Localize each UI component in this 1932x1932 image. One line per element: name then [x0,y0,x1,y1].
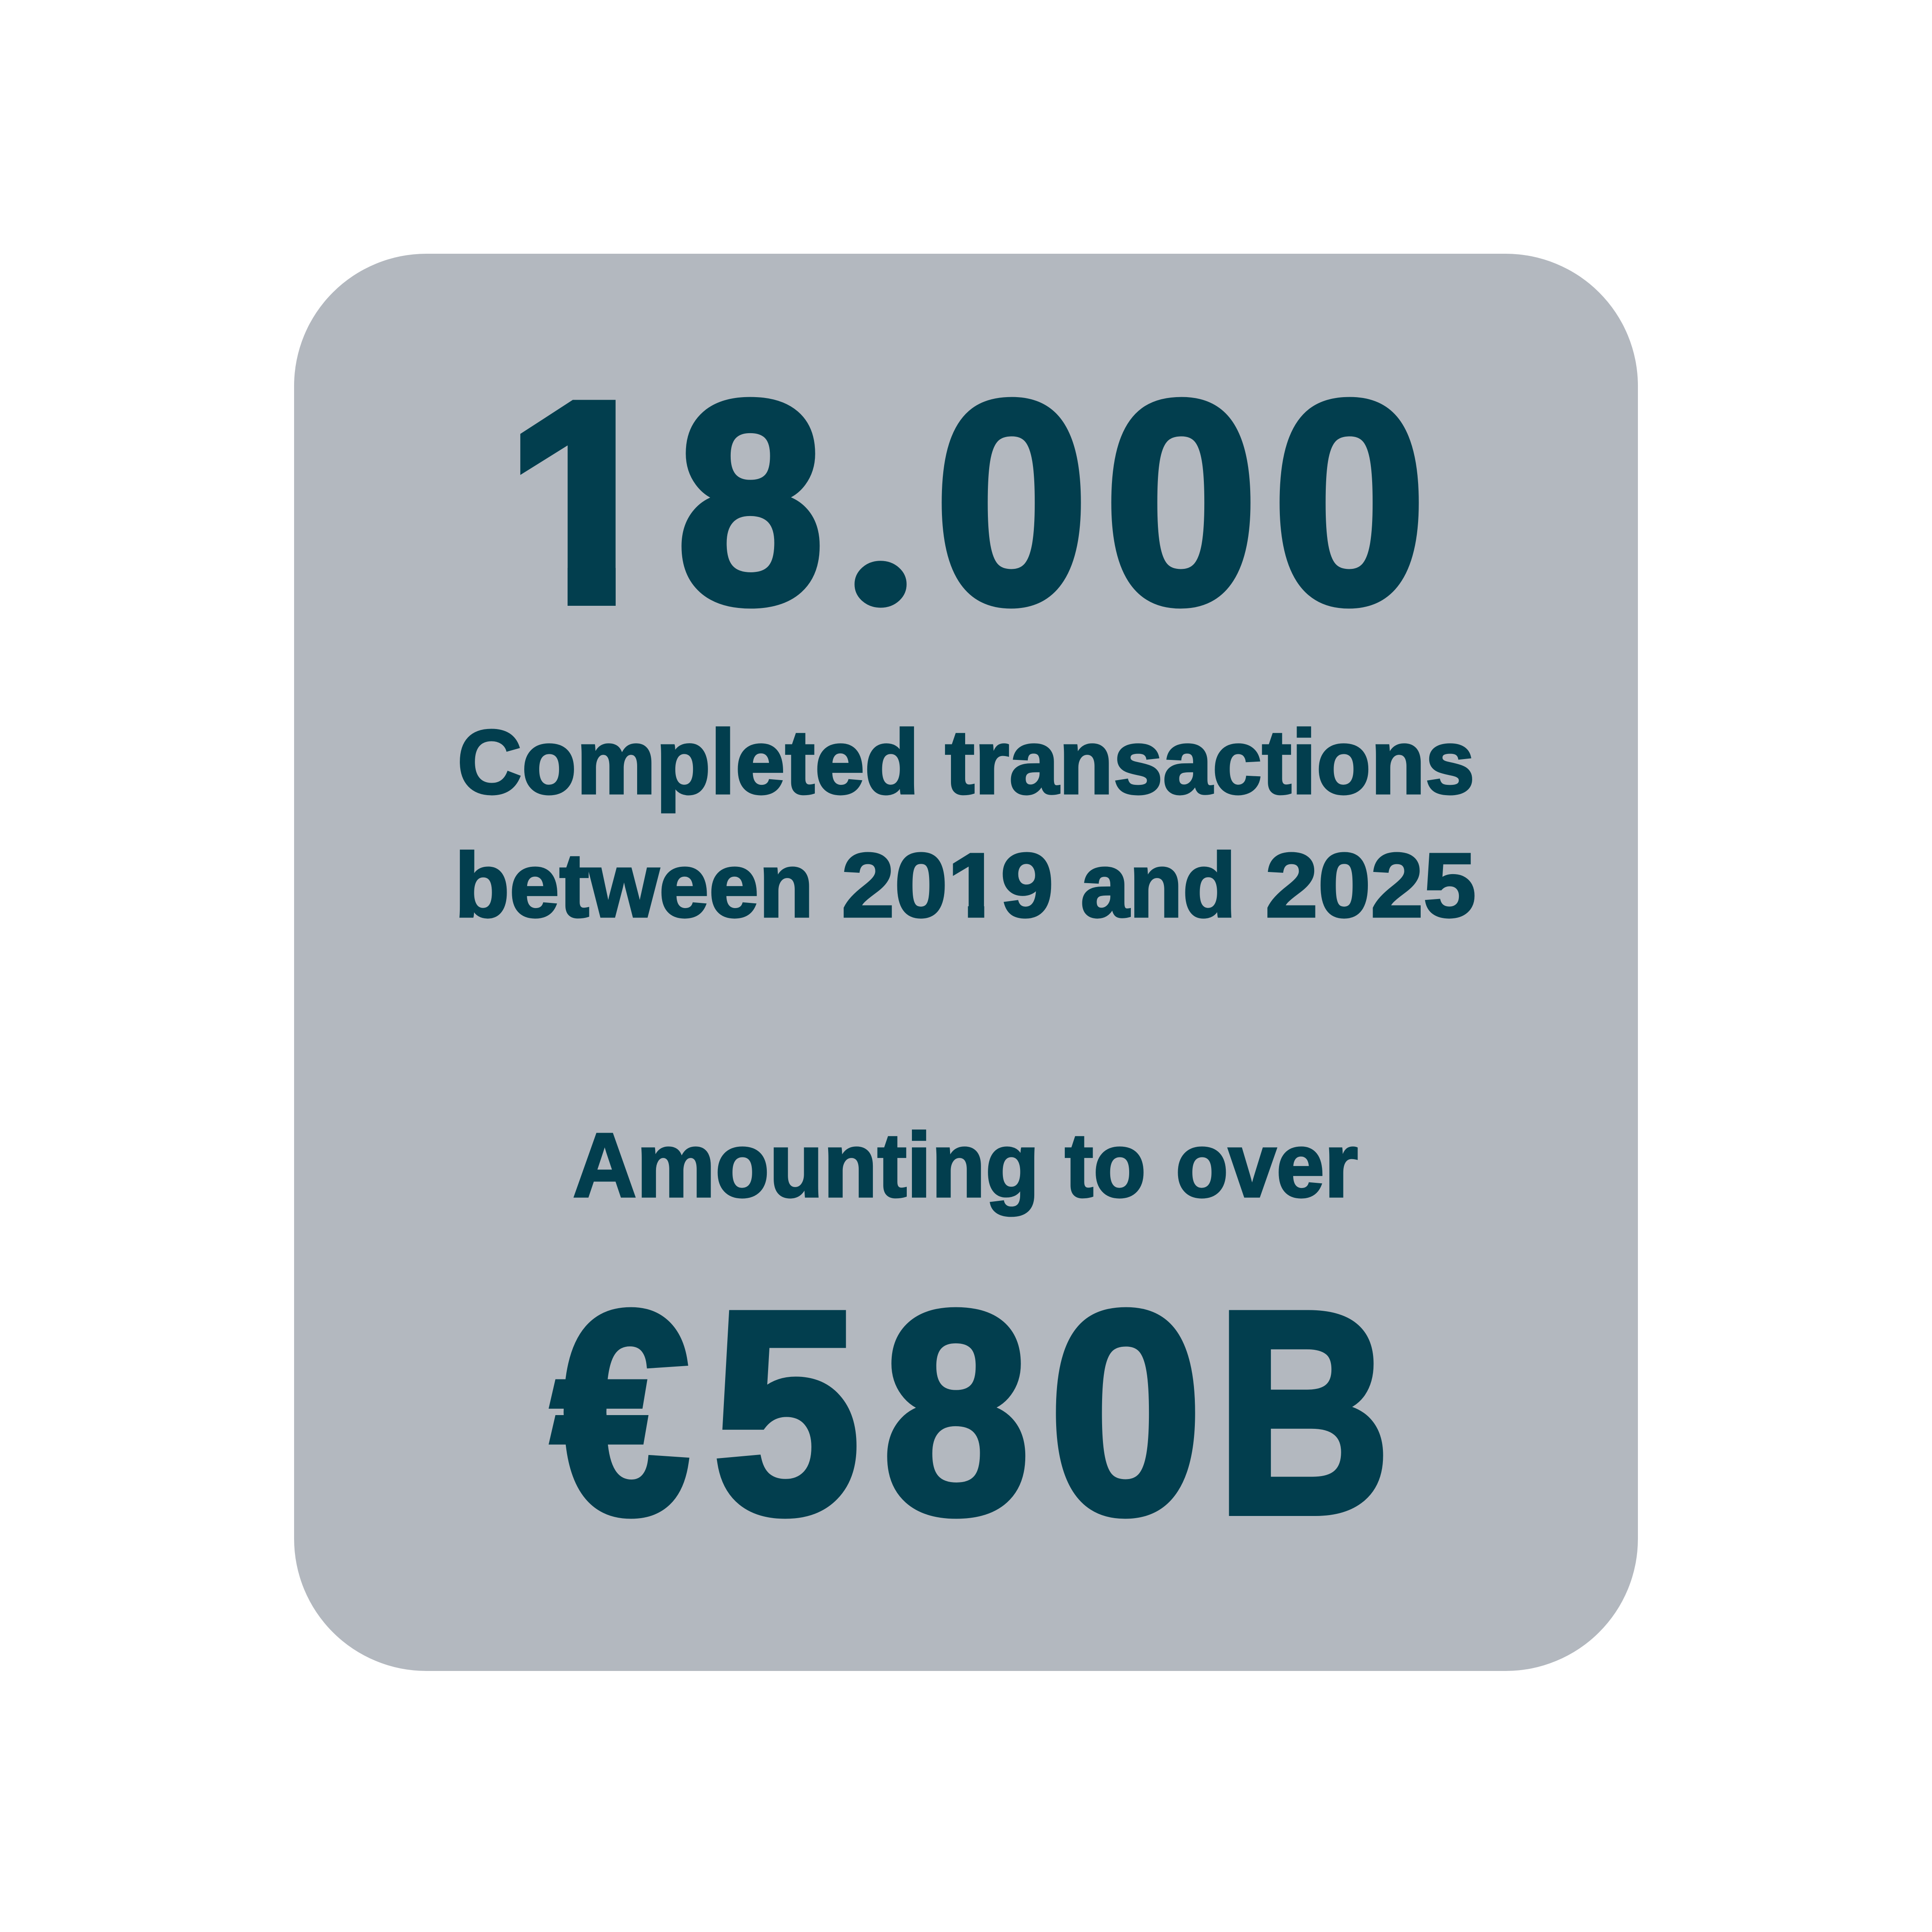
text block: completed transactions: 2019 [841,834,1054,936]
big number: €580B: 0 [1049,1252,1202,1573]
text block: completed transactions: 2025 [1265,834,1476,936]
big number: €580B [552,1252,1391,1573]
big number: 18.000: 0 [1273,342,1426,662]
big number: 18.000: 1 [505,342,665,662]
big number: 18.000: 0 [935,342,1088,662]
big number: 18.000: 0 [1105,342,1258,662]
big number: €580B: € [552,1252,690,1573]
big number: 18.000: 8 [677,342,824,663]
big number: 18.000 [505,342,1426,663]
text block: amounting to over: over [1176,1114,1358,1216]
text block: completed transactions: between [455,834,814,936]
big number: €580B: B [1216,1252,1391,1573]
big number: €580B: 8 [883,1252,1030,1573]
text block: completed transactions: Completed [457,711,919,813]
text block: completed transactions [455,711,1476,936]
panel: stat card [294,254,1638,1671]
text block: amounting to over: to [1065,1114,1146,1216]
text block: amounting to over [573,1114,1358,1216]
big number: €580B: 5 [713,1252,860,1573]
text block: completed transactions: transactions [945,711,1475,813]
text block: completed transactions: and [1081,834,1236,936]
big number: 18.000: . [848,393,913,650]
text block: amounting to over: Amounting [573,1114,1039,1216]
